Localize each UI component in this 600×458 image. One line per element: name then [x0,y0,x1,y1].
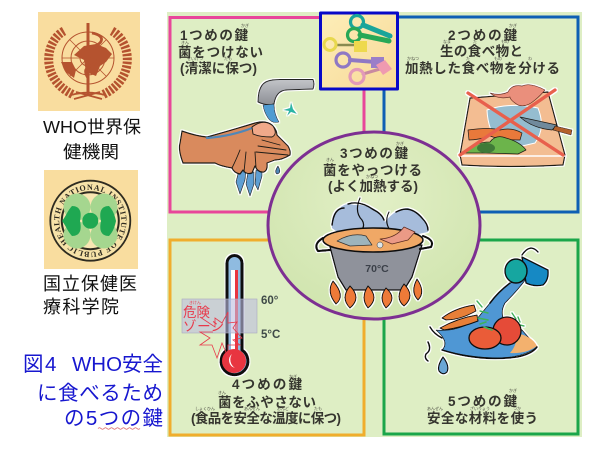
heading: key 4: おんど [277,405,289,411]
temperature labels: 60° [261,295,279,307]
NIPH caption [43,274,137,317]
panel: key 1 keep clean [170,18,364,212]
figure title: の5つの鍵 [64,407,163,430]
heading: key 4 [191,373,341,426]
icon: water poured over vegetables [425,248,548,374]
heading: key 1: (清潔に保つ) [180,60,257,76]
heading: key 2: 加熱した食べ物を分ける [405,60,560,76]
heading: key 2: 2つめの鍵 [448,27,518,43]
National Institute of Public Health logo [44,170,138,269]
heading: key 2: もの [501,39,509,44]
heading: key 5: 安全な材料を使う [427,410,538,426]
panel: key 2 separate raw and cooked [384,17,578,212]
danger zone band [182,299,257,333]
figure title [23,353,163,430]
danger zone label: 危険 [183,305,210,320]
NIPH caption: 療科学院 [43,297,119,317]
icon: washing hands under a tap [179,80,314,196]
heading: key 4: 4つめの鍵 [232,376,302,392]
National Institute of Public Health logo: HEALTH NATIONAL INSTITUTE OF PUBLIC [54,184,127,258]
heading: key 1: きん [181,40,189,45]
WHO caption: 健機関 [63,142,119,162]
WHO logo [38,12,140,111]
icon: crossed out cutting board [460,85,572,166]
heading: key 2: かねつ [407,55,419,61]
green background panel [167,12,582,437]
heading: key 1: 1つめの鍵 [180,27,248,43]
figure title: に食べるため [37,382,163,405]
heading: key 5: 5つめの鍵 [448,393,518,409]
panel: key 5 use safe ingredients [384,240,578,434]
heading: key 5: かぎ [509,387,517,393]
WHO caption: WHO世界保 [43,117,141,137]
panel: key 4 keep food at safe temperature [170,240,364,435]
panel: key 3 kill germs, centre circle [268,132,480,319]
icon: thermometer [221,256,248,375]
heading: key 2 [405,22,560,76]
heading: key 1: たも [224,55,232,61]
temperature labels: 5°C [261,329,280,341]
heading: key 3: (よく加熱する) [328,178,418,194]
heading: key 2: た [473,38,477,44]
icon: coloured keys box [320,13,398,89]
heading: key 5 [427,387,538,426]
icon: boiling pot over flames: 70°C [365,263,389,275]
figure title: 安全 [122,353,163,376]
heading: key 1: 菌をつけない [178,45,263,60]
heading: key 3: 菌をやっつける [323,163,422,178]
heading: key 2: わ [528,55,532,61]
heading: key 3: かねつ [366,173,378,179]
WHO caption [43,117,141,162]
heading: key 1 [178,22,263,76]
NIPH caption: 国立保健医 [43,274,137,294]
heading: key 4: 菌をふやさない [218,395,316,410]
danger zone label: きけん [189,299,201,305]
heading: key 5: あんぜん [427,405,443,411]
figure title: WHO [72,353,122,376]
heading: key 4: たも [314,405,322,411]
heading: key 2: た [466,55,470,61]
figure title: 図 [23,353,44,376]
heading: key 2: なま [443,38,451,44]
heading: key 3: きん [326,157,334,162]
heading: key 4: しょくひん [195,406,215,411]
heading: key 5: ざいりょう [470,405,490,411]
heading: key 1: かぎ [241,22,249,28]
heading: key 4: かぎ [289,373,297,379]
danger zone label: ゾーン [183,319,224,334]
heading: key 2: もの [494,56,502,61]
heading: key 1: せいけつ [187,55,203,61]
heading: key 3 [323,140,422,194]
danger zone label [183,299,242,358]
heading: key 2: 生の食べ物と [440,43,523,59]
figure title: 4 [45,353,56,376]
heading: key 5: つか [513,405,521,411]
heading: key 4: (食品を安全な温度に保つ) [191,410,341,426]
icon: boiling pot over flames [316,198,432,308]
heading: key 4: あんぜん [244,405,260,411]
heading: key 2: かぎ [509,22,517,28]
heading: key 4: きん [218,390,226,395]
heading: key 3: かぎ [396,140,404,146]
heading: key 3: 3つめの鍵 [340,145,408,161]
temperature labels [261,295,280,341]
